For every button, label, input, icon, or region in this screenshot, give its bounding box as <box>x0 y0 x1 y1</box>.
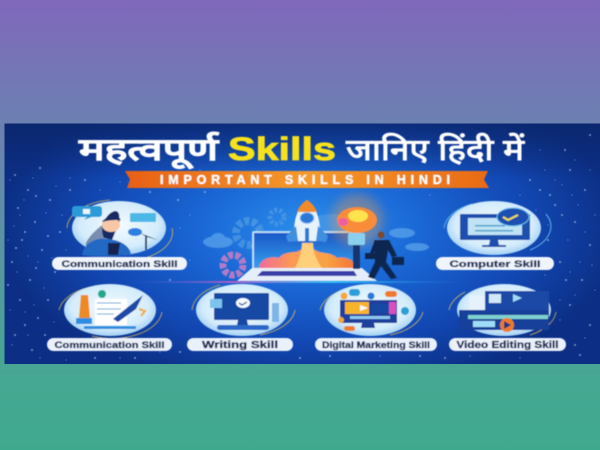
label pill: Communication Skill <box>54 340 164 351</box>
skill: digital marketing <box>315 284 437 351</box>
laptop <box>237 231 377 281</box>
label pill: Communication Skill <box>62 259 178 270</box>
title: hindi word: महत्वपूर्ण <box>78 131 220 170</box>
icon: desktop computer <box>192 284 295 336</box>
title: skills: Skills <box>228 131 336 167</box>
label pill: Video Editing Skill <box>456 340 559 351</box>
skill: computer <box>436 201 554 270</box>
gear: purple <box>223 255 243 275</box>
title: hindi ending: जानिए हिंदी में <box>345 132 525 167</box>
skill: video editing <box>449 284 566 351</box>
ribbon <box>125 171 489 188</box>
label pill: Writing Skill <box>202 340 278 351</box>
businessman <box>365 232 404 279</box>
banner panel <box>4 124 600 364</box>
central illustration <box>203 194 429 281</box>
glow bar <box>130 281 470 283</box>
icon: marketing screen <box>320 284 423 336</box>
gears and clouds <box>236 210 284 245</box>
skill: writing <box>187 284 295 351</box>
title <box>78 131 525 170</box>
icon: document and pen <box>59 284 162 338</box>
flames <box>259 250 355 268</box>
icon: monitor with check <box>444 201 551 255</box>
icon: video timeline <box>449 284 556 336</box>
icon: speaker with microphone <box>67 200 173 261</box>
skill: communication top <box>52 200 187 270</box>
label pill: Digital Marketing Skill <box>322 340 430 350</box>
ribbon: IMPORTANT SKILLS IN HINDI <box>160 173 450 187</box>
skill: communication bottom <box>47 284 172 351</box>
light bulb <box>331 194 383 269</box>
rocket <box>286 200 328 242</box>
label pill: Computer Skill <box>450 259 540 270</box>
